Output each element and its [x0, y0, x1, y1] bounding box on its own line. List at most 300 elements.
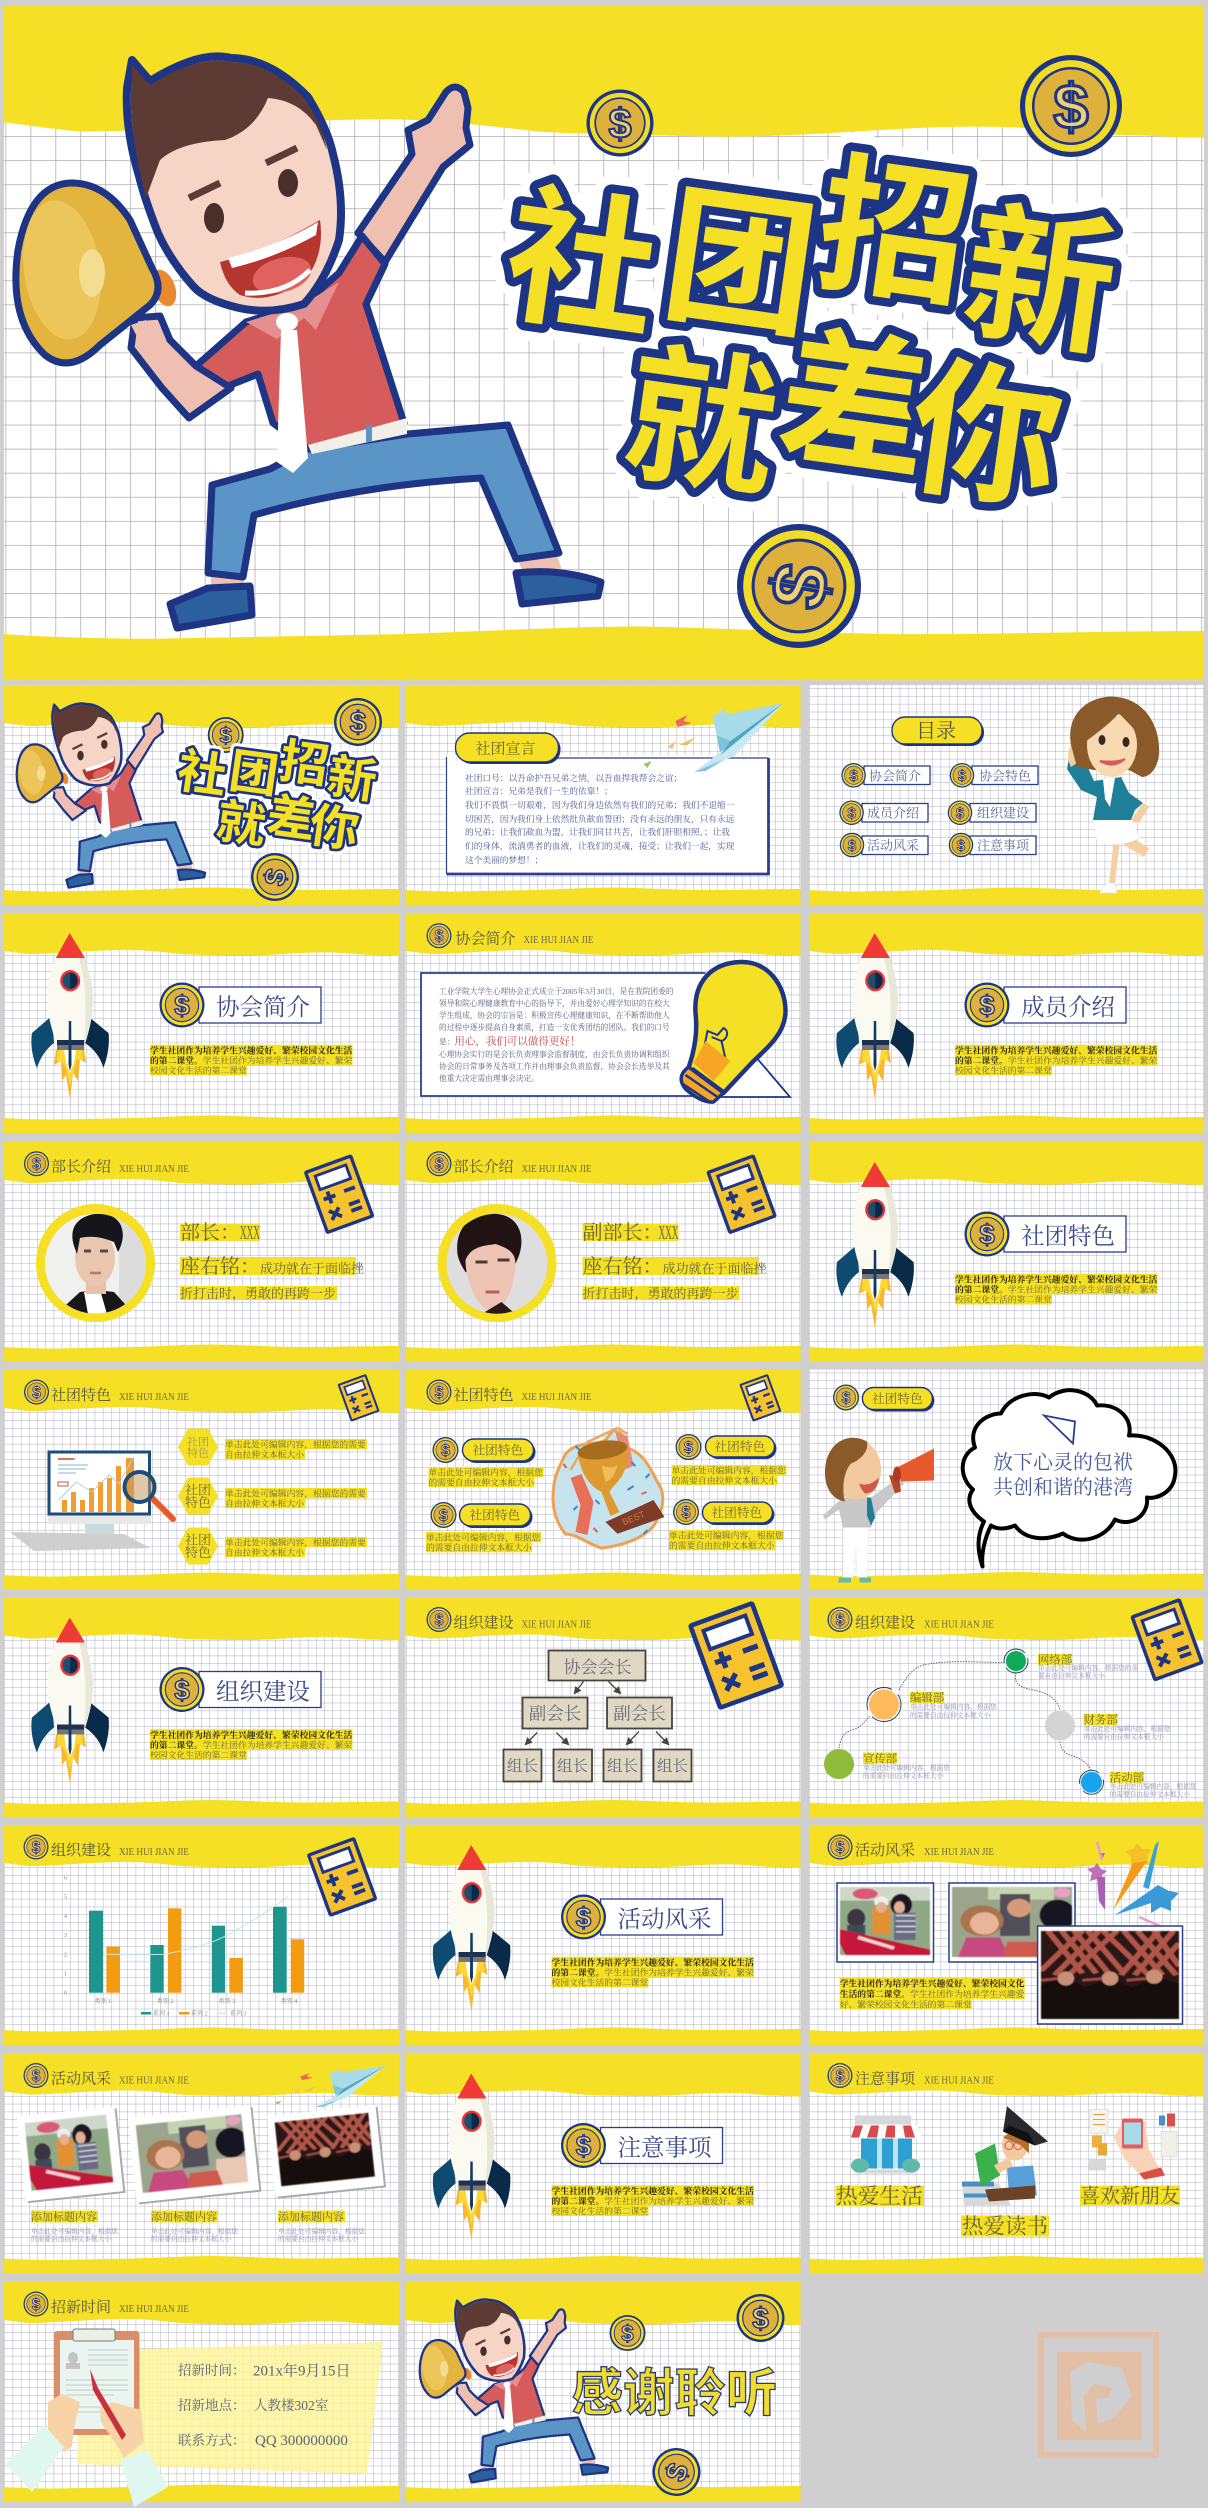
panel: slide 5 association intro: [406, 913, 800, 1133]
portrait: male president: [34, 1202, 159, 1322]
card: declaration text: 的兄弟；让我们歃血为盟，让我们同甘共苦，让我们肝胆相照，；让我: [465, 826, 730, 838]
title: 差: [263, 789, 319, 848]
highlighted text: 的第二课堂。学生社团作为培养学生兴趣爱好、繁荣: [955, 1054, 1158, 1065]
icon: calculator: [1132, 1600, 1202, 1680]
slide header: 招新时间: [51, 2298, 111, 2316]
caption 2: 单击此处可编辑内容，根据您: [151, 2226, 238, 2236]
caption 3: 的需要自由拉伸文本框大小: [278, 2234, 359, 2243]
panel: slide 16 bar chart: [4, 1825, 399, 2045]
bar chart: 系列 3: [230, 2010, 247, 2018]
polaroid 3: [267, 2105, 386, 2199]
callout: speech bubble: 共创和谐的港湾: [993, 1476, 1133, 1499]
caption 2: [151, 2210, 238, 2243]
org chart: 组长: [557, 1757, 588, 1775]
feature list: [178, 1428, 367, 1564]
card: intro text: 学生组成，协会的宗旨是：积极宣传心理健康知识，在不断帮助他人: [439, 1010, 670, 1021]
slide header: XIE HUI JIAN JIE: [522, 1164, 592, 1175]
slide header: XIE HUI JIAN JIE: [924, 1620, 994, 1630]
callout: speech bubble: 放下心灵的包袱: [993, 1451, 1133, 1474]
card: declaration text: [446, 755, 768, 874]
node: 活动部: 单击此处可编辑内容，根据您: [1110, 1782, 1197, 1792]
label group: bottom right: [669, 1499, 784, 1550]
caption 2: 的需要自由拉伸文本框大小: [151, 2234, 232, 2243]
highlighted text: [150, 1729, 353, 1760]
icon: rocket: [433, 1845, 510, 2012]
menu item grid: 成员介绍: [867, 806, 919, 821]
icon: calculator: [339, 1375, 378, 1421]
card: declaration text: 社团宣言：兄弟是我们一生的依靠！；: [465, 785, 613, 796]
profile lines: 副部长：: [582, 1221, 662, 1244]
label group: bottom left: [426, 1502, 541, 1552]
slide header: [828, 2063, 994, 2088]
label group: top right: [672, 1434, 786, 1485]
label group: bottom right: 单击此处可编辑内容，根据您: [669, 1529, 784, 1541]
node: 宣传部: 单击此处可编辑内容，根据您: [863, 1763, 950, 1773]
highlighted text: 学生社团作为培养学生兴趣爱好、繁荣校园文化生活: [150, 1044, 353, 1055]
menu item grid: 组织建设: [977, 806, 1029, 821]
polaroid 2: [128, 2105, 261, 2205]
title: 社团招新就差你: 差: [769, 311, 941, 499]
feature list: 社团: [185, 1532, 211, 1548]
title: 社: [174, 744, 230, 804]
feature list: 自由拉伸文本框大小: [225, 1448, 304, 1459]
node: 财务部: 的需要自由拉伸文本框大小: [1084, 1732, 1164, 1741]
slide header: 组织建设: [855, 1614, 915, 1632]
panel: slide 10 features with monitor: [4, 1370, 399, 1590]
icon: rocket: [31, 933, 109, 1100]
heading pill: 目录: 目录: [916, 720, 956, 743]
title: 招: [276, 735, 332, 794]
slide header: 注意事项: [855, 2070, 916, 2088]
label group: top left: [428, 1437, 544, 1487]
node: 财务部: 单击此处可编辑内容，根据您: [1084, 1724, 1171, 1734]
caption 2: 添加标题内容: [151, 2210, 217, 2224]
title: 社团招新就差你: 团: [654, 170, 826, 358]
title: 社团招新就差你: 就: [615, 329, 787, 517]
slide header: XIE HUI JIAN JIE: [119, 1392, 189, 1403]
panel: slide 20 section 注意事项: [406, 2054, 800, 2274]
info lines: 人教楼302室: [254, 2397, 328, 2413]
slide header: XIE HUI JIAN JIE: [522, 1392, 592, 1403]
title: 你: [306, 799, 362, 858]
panel: slide 23 thank you: [406, 2282, 800, 2503]
illustration: man with megaphone: [823, 1438, 934, 1582]
panel: slide 15 departments timeline: [809, 1598, 1204, 1818]
profile lines: 折打击时，勇敢的再跨一步: [180, 1286, 336, 1302]
info lines: [178, 2362, 351, 2449]
highlighted text: 校园文化生活的第二课堂: [955, 1293, 1052, 1304]
icon: light bulb: [681, 962, 790, 1102]
slide header: XIE HUI JIAN JIE: [522, 1620, 592, 1630]
feature list: 自由拉伸文本框大小: [225, 1546, 304, 1557]
org chart: 组长: [507, 1757, 538, 1775]
info lines: QQ 300000000: [255, 2433, 348, 2449]
slide header: XIE HUI JIAN JIE: [924, 2076, 994, 2086]
panel: hero cover slide: [4, 6, 1204, 680]
section tag: [160, 982, 321, 1028]
bar chart: 4: [64, 1914, 67, 1920]
slide header: [426, 1151, 592, 1176]
highlighted text: 的第二课堂。学生社团作为培养学生兴趣爱好、繁荣: [552, 2195, 754, 2206]
node: 宣传部: [824, 1749, 950, 1780]
label group: top right: 单击此处可编辑内容，根据您: [672, 1464, 786, 1476]
org chart: 协会会长: [564, 1658, 632, 1677]
panel: slide 13 section 组织建设: [4, 1598, 399, 1818]
label group: bottom left: 的需要自由拉伸文本框大小: [426, 1541, 532, 1552]
card: declaration text: 这个美丽的梦想！；: [465, 854, 543, 865]
section tag: [964, 1212, 1126, 1256]
slide header: [828, 1834, 994, 1860]
highlighted text: 好、繁荣校园文化生活的第二课堂: [840, 1999, 972, 2010]
feature list: 特色: [185, 1545, 211, 1560]
slide header: XIE HUI JIAN JIE: [119, 2304, 189, 2315]
title: 社团招新就差你: 你: [900, 342, 1072, 530]
icon: calculator: [690, 1603, 782, 1708]
panel: slide 2 club declaration: [406, 685, 800, 905]
title: [174, 735, 380, 858]
illustration: reading boy with mortarboard: [962, 2106, 1048, 2206]
caption 3: [278, 2210, 365, 2243]
profile lines: 座右铭：成功就在于面临挫: [582, 1255, 768, 1278]
highlighted text: 的第二课堂。学生社团作为培养学生兴趣爱好、繁荣: [150, 1739, 353, 1750]
feature list: 单击此处可编辑内容，根据您的需要: [225, 1438, 366, 1450]
node: 编辑部: 编辑部: [910, 1691, 945, 1705]
panel: slide 1 cover thumbnail: [4, 685, 399, 905]
org chart: 副会长: [529, 1704, 581, 1724]
slide header: [426, 1380, 592, 1404]
label: coin pill: 社团特色: [872, 1391, 923, 1406]
node: 网络部: 要自由拉伸文本框大小: [1038, 1671, 1105, 1680]
bar chart: 类别 3: [219, 1997, 235, 2005]
section tag: 协会简介: [216, 994, 310, 1021]
section tag: [561, 2123, 722, 2168]
menu item grid: [839, 763, 1038, 857]
title: 社团招新就差你: 就: [615, 329, 787, 517]
highlighted text: 学生社团作为培养学生兴趣爱好、繁荣校园文化生活: [150, 1729, 353, 1740]
title: 就: [213, 795, 269, 854]
title: 社团招新就差你: 招: [808, 139, 980, 327]
icon: small coin: [586, 90, 654, 156]
bar chart: 2: [64, 1952, 67, 1958]
node: 宣传部: 的需要自由拉伸文本框大小: [863, 1771, 944, 1780]
label group: bottom left: 社团特色: [470, 1508, 521, 1522]
slide header: XIE HUI JIAN JIE: [524, 935, 594, 946]
label group: bottom right: 社团特色: [712, 1505, 763, 1520]
org chart: 组长: [657, 1757, 688, 1775]
card: intro text: 协会的日常事务及各项工作并由理事会负责监督，协会会长选举及其: [439, 1061, 670, 1072]
panel: slide 14 org chart: [406, 1598, 800, 1818]
card: intro text: 工业学院大学生心理协会正式成立于2005年3月30日，是在我院团委的: [439, 986, 674, 997]
photo 3: [1038, 1926, 1182, 2024]
bar chart: 类别 2: [157, 1997, 173, 2005]
profile lines: XXX: [658, 1222, 679, 1244]
card: intro text: 心理协会实行的是会长负责理事会监督制度，由会长负责协调和组织: [439, 1049, 670, 1060]
bar chart: 6: [64, 1876, 67, 1882]
heading pill: 社团宣言: [456, 733, 560, 764]
title: 团: [226, 744, 282, 804]
node: 活动部: [1080, 1770, 1197, 1798]
panel: slide 3 table of contents: [809, 685, 1204, 905]
icon: coins: [610, 2294, 784, 2503]
highlighted text: 学生社团作为培养学生兴趣爱好、繁荣校园文化生活: [955, 1273, 1158, 1284]
highlighted text: 学生社团作为培养学生兴趣爱好、繁荣校园文化生活: [552, 1956, 754, 1967]
slide header: XIE HUI JIAN JIE: [924, 1847, 994, 1858]
feature list: 单击此处可编辑内容，根据您的需要: [225, 1536, 366, 1548]
slide header: [828, 1607, 994, 1632]
slide header: [24, 1151, 189, 1176]
panel: slide 22 recruiting info: [4, 2282, 399, 2507]
icon: paper plane: [644, 703, 784, 772]
icon: rocket: [31, 1618, 109, 1784]
heading pill: 目录: [892, 717, 984, 746]
caption 1: 的需要自由拉伸文本框大小: [31, 2234, 112, 2243]
caption 1: [31, 2210, 118, 2243]
info lines: 招新时间：: [178, 2362, 246, 2378]
feature list: 社团: [185, 1482, 211, 1498]
icon: coins: [208, 698, 382, 905]
card: declaration text: 社团口号：以吾命护吾兄弟之情，以吾血捍我帮会之谊；: [465, 772, 682, 784]
org chart: 组长: [607, 1757, 638, 1775]
slide header: 协会简介: [456, 930, 516, 948]
illustration: hand with phone and documents: [1089, 2110, 1177, 2180]
title: 团: [226, 744, 282, 804]
org chart: [504, 1650, 692, 1782]
title: 招: [276, 735, 332, 794]
illustration: monitor with growth chart: [10, 1452, 173, 1551]
slide header: XIE HUI JIAN JIE: [119, 1164, 189, 1175]
menu item grid: 协会特色: [979, 768, 1031, 783]
highlighted text: 学生社团作为培养学生兴趣爱好、繁荣校园文化生活: [955, 1044, 1158, 1055]
node: 网络部: 单击此处可编辑内容，根据您的需: [1038, 1663, 1139, 1673]
label group: bottom left: 单击此处可编辑内容，根据您: [426, 1531, 541, 1543]
label: 热爱读书: 热爱读书: [962, 2214, 1048, 2238]
slide header: 组织建设: [454, 1614, 514, 1632]
panel: slide 18 activity photos: [809, 1825, 1204, 2045]
section tag: 注意事项: [618, 2134, 712, 2162]
section tag: [160, 1667, 321, 1712]
callout: speech bubble: [963, 1390, 1175, 1566]
menu item grid: 活动风采: [867, 838, 919, 853]
panel: slide 8 vice president: [406, 1142, 800, 1362]
label group: top right: 的需要自由拉伸文本框大小: [672, 1474, 777, 1485]
illustration: man with megaphone: [15, 56, 601, 628]
feature list: 单击此处可编辑内容，根据您的需要: [225, 1487, 366, 1499]
title: 差: [263, 789, 319, 848]
card: intro text: 领导和院心理健康教育中心的指导下，并由爱好心理学知识的在校大: [439, 998, 670, 1009]
dotted connector path: [839, 1662, 1092, 1772]
section tag: 成员介绍: [1021, 994, 1115, 1021]
bar chart: 系列 2: [191, 2010, 208, 2018]
highlighted text: 校园文化生活的第二课堂: [955, 1064, 1052, 1075]
icon: rocket: [836, 1162, 914, 1329]
caption 3: 添加标题内容: [278, 2210, 344, 2224]
icon: calculator: [740, 1375, 780, 1421]
profile lines: 部长：: [180, 1221, 240, 1244]
card: intro text: 他重大决定需由理事会决定。: [439, 1073, 539, 1083]
title: 你: [306, 799, 362, 858]
panel: slide 11 features with trophy: [406, 1370, 800, 1590]
title: 社团招新就差你: 新: [954, 188, 1126, 376]
feature list: 自由拉伸文本框大小: [225, 1497, 304, 1508]
note background: [78, 2342, 383, 2474]
label: coin pill: [833, 1384, 934, 1412]
profile lines: [180, 1221, 365, 1302]
icon: rocket: [836, 933, 914, 1100]
title: 社团招新就差你: 社: [496, 170, 668, 358]
slide header: [24, 2292, 189, 2316]
icon: paper plane: [275, 2066, 386, 2107]
card: intro text: [421, 973, 736, 1096]
section tag: [964, 982, 1126, 1028]
highlighted text: 校园文化生活的第二课堂: [150, 1064, 247, 1075]
profile lines: XXX: [240, 1222, 260, 1244]
illustration: clipboard with hands: [6, 2329, 168, 2507]
node: 宣传部: 宣传部: [863, 1751, 898, 1765]
icon: calculator: [309, 1839, 376, 1915]
profile lines: [582, 1221, 768, 1302]
bar chart: 5: [64, 1895, 67, 1901]
polaroid 1: [17, 2106, 125, 2203]
card: intro text: 是：用心，我们可以做得更好！: [439, 1034, 580, 1048]
title: 社团招新就差你: 差: [769, 311, 941, 499]
title: 就: [213, 795, 269, 854]
highlighted text: [552, 1956, 754, 1988]
photo 2: [949, 1883, 1076, 1962]
highlighted text: 生活的第二课堂。学生社团作为培养学生兴趣爱: [840, 1988, 1025, 1999]
card: intro text: 的过程中逐步提高自身素质，打造一支优秀团结的团队。我们的口号: [439, 1022, 670, 1033]
title: 社团招新就差你: 你: [900, 342, 1072, 530]
label: 喜欢新朋友: 喜欢新朋友: [1080, 2184, 1180, 2208]
bar chart: 类别 1: [95, 1997, 111, 2005]
panel: slide 9 section 社团特色: [809, 1142, 1204, 1362]
section tag: [561, 1894, 722, 1940]
highlighted text: 校园文化生活的第二课堂: [552, 2205, 648, 2216]
node: 编辑部: 的需要自由拉伸文本框大小: [910, 1710, 991, 1720]
label group: top right: 社团特色: [714, 1439, 766, 1454]
illustration: man with megaphone: [419, 2300, 608, 2482]
menu item grid: 注意事项: [977, 838, 1030, 853]
slide header: 活动风采: [51, 2070, 111, 2088]
feature list: 特色: [187, 1446, 209, 1460]
slide header: [24, 2063, 189, 2088]
card: declaration text: 我们不畏惧一切艰难，因为我们身边依然有我们的兄弟；我们不退缩一: [465, 799, 735, 811]
slide header: 社团特色: [454, 1387, 514, 1404]
info lines: 201x年9月15日: [253, 2362, 351, 2380]
label: 热爱生活: 热爱生活: [836, 2184, 923, 2208]
org chart: 副会长: [613, 1704, 666, 1724]
feature list: 社团: [187, 1434, 209, 1448]
panel: slide 19 polaroid photos: [4, 2054, 399, 2274]
panel: slide 21 notes with three icons: [809, 2054, 1204, 2274]
heading pill: 社团宣言: 社团宣言: [476, 741, 536, 758]
bar chart: 系列 1: [153, 2010, 170, 2018]
label group: top left: 单击此处可编辑内容，根据您: [428, 1466, 543, 1478]
bar chart: [64, 1876, 304, 2018]
card: declaration text: 切困苦，因为我们身上依然批负歃血誓团；没有永远的朋友，只有永远: [465, 813, 735, 825]
caption 1: 添加标题内容: [31, 2210, 97, 2224]
slide header: [426, 923, 594, 948]
caption 1: 单击此处可编辑内容，根据您: [31, 2226, 118, 2236]
highlighted text: [552, 2185, 754, 2216]
label group: bottom right: 的需要自由拉伸文本框大小: [669, 1539, 775, 1550]
card: declaration text: 们的身体，流淌勇者的血液，让我们的灵魂，接受；让我们一起，实现: [465, 840, 735, 852]
highlighted text: 的第二课堂。学生社团作为培养学生兴趣爱好、繁荣: [552, 1966, 754, 1977]
caption 3: 单击此处可编辑内容，根据您: [278, 2226, 365, 2236]
illustration: woman waving: [1067, 697, 1159, 893]
slide header: 活动风采: [855, 1842, 915, 1859]
icon: top right coin: [1020, 55, 1122, 157]
title: 社团招新就差你: 社: [496, 170, 668, 358]
slide header: XIE HUI JIAN JIE: [119, 1847, 189, 1858]
node: 编辑部: 单击此处可编辑内容，根据您: [910, 1702, 997, 1712]
node: 财务部: 财务部: [1084, 1713, 1118, 1727]
panel: slide 6 section 成员介绍: [809, 913, 1204, 1133]
highlighted text: [150, 1044, 353, 1076]
highlighted text: 校园文化生活的第二课堂: [552, 1976, 648, 1987]
node: 财务部: [1045, 1710, 1171, 1741]
bar chart: 3: [64, 1933, 67, 1939]
illustration: trophy: BEST: [621, 1509, 647, 1527]
title: 新: [324, 750, 380, 809]
title: 新: [324, 750, 380, 809]
icon: large bottom coin: [727, 514, 871, 658]
info lines: 招新地点：: [178, 2397, 246, 2413]
icon: store: [851, 2116, 922, 2174]
illustration: trophy: [553, 1428, 664, 1548]
panel: slide 17 section 活动风采: [406, 1825, 800, 2045]
watermark stamp logo: [1041, 2335, 1156, 2455]
title: 社团招新就差你: [496, 139, 1126, 530]
feature list: 特色: [185, 1495, 211, 1510]
icon: calculator: [708, 1156, 775, 1232]
section tag: 组织建设: [216, 1678, 310, 1706]
node: 网络部: [1004, 1649, 1139, 1680]
highlighted text: 学生社团作为培养学生兴趣爱好、繁荣校园文化: [840, 1978, 1025, 1989]
slide header: 社团特色: [51, 1387, 111, 1404]
bar chart: 1: [64, 1972, 67, 1978]
title: 社: [174, 744, 230, 804]
heading: 感谢聆听: 感谢聆听: [572, 2364, 778, 2422]
icon: calculator: [306, 1156, 373, 1232]
profile lines: 座右铭：成功就在于面临挫: [180, 1255, 365, 1278]
info lines: 联系方式：: [178, 2433, 246, 2448]
slide header: [24, 1834, 189, 1860]
illustration: stars burst: [1087, 1841, 1179, 1930]
label group: top left: 的需要自由拉伸文本框大小: [428, 1476, 534, 1487]
highlighted text: [955, 1273, 1158, 1304]
title: 社团招新就差你: 招: [808, 139, 980, 327]
slide header: XIE HUI JIAN JIE: [119, 2076, 189, 2086]
highlighted text: [955, 1044, 1158, 1076]
photo 1: [837, 1883, 934, 1962]
slide header: 组织建设: [51, 1842, 111, 1859]
portrait: female vice president: [436, 1202, 560, 1322]
highlighted text: 校园文化生活的第二课堂: [150, 1749, 247, 1760]
title: 社团招新就差你: 团: [654, 170, 826, 358]
bar chart: 类别 4: [281, 1997, 297, 2005]
highlighted text: [840, 1978, 1025, 2010]
illustration: man with megaphone: [16, 704, 205, 888]
section tag: 活动风采: [618, 1906, 712, 1933]
panel: slide 7 president: [4, 1142, 399, 1362]
highlighted text: 的第二课堂。学生社团作为培养学生兴趣爱好、繁荣: [150, 1054, 353, 1065]
slide header: 部长介绍: [454, 1158, 514, 1176]
menu item grid: 协会简介: [869, 768, 921, 783]
highlighted text: 的第二课堂。学生社团作为培养学生兴趣爱好、繁荣: [955, 1283, 1158, 1294]
panel: slide 12 speech bubble: [809, 1370, 1204, 1590]
node: 编辑部: [867, 1688, 997, 1722]
node: 活动部: 活动部: [1110, 1770, 1144, 1784]
